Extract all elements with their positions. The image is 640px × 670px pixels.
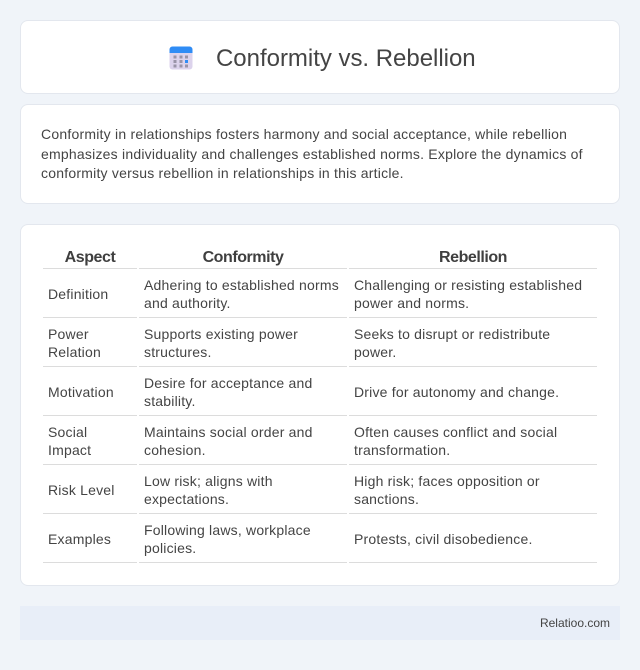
row: power relation: Relation — [48, 344, 101, 360]
row: risk level: Risk Level — [48, 482, 115, 498]
table header: Aspect — [65, 249, 115, 266]
row: examples: Protests, civil disobedience. — [354, 531, 533, 547]
row: risk level: sanctions. — [354, 491, 419, 507]
row: risk level: expectations. — [144, 491, 229, 507]
intro text: Conformity in relationships fosters harmony and social acceptance, while rebellion — [41, 126, 567, 142]
row: power relation — [43, 326, 597, 367]
row: social impact: transformation. — [354, 442, 450, 458]
row: definition: power and norms. — [354, 295, 469, 311]
row: motivation — [43, 375, 597, 416]
intro text: conformity versus rebellion in relationships in this article. — [41, 165, 404, 181]
row: definition: Definition — [48, 286, 108, 302]
row: social impact: Social — [48, 424, 87, 440]
row: examples: Following laws, workplace — [144, 522, 311, 538]
row: social impact: Maintains social order and — [144, 424, 313, 440]
row: definition: Challenging or resisting established — [354, 277, 582, 293]
panel: introduction — [20, 104, 620, 204]
intro text — [41, 126, 583, 181]
row: risk level: Low risk; aligns with — [144, 473, 273, 489]
footer credit: Relatioo.com — [540, 616, 610, 630]
row: examples: policies. — [144, 540, 196, 556]
row: social impact — [43, 424, 597, 465]
row: social impact: Impact — [48, 442, 91, 458]
row: power relation: Seeks to disrupt or redistribute — [354, 326, 550, 342]
intro text: emphasizes individuality and challenges established norms. Explore the dynamics of — [41, 146, 583, 162]
row: motivation: Motivation — [48, 384, 114, 400]
row: risk level: High risk; faces opposition or — [354, 473, 540, 489]
table header: Conformity — [203, 249, 283, 266]
row: social impact: Often causes conflict and social — [354, 424, 557, 440]
row: power relation: Power — [48, 326, 89, 342]
title: Conformity vs. Rebellion — [216, 45, 476, 72]
row: definition: Adhering to established norms — [144, 277, 339, 293]
row: power relation: structures. — [144, 344, 212, 360]
icon: calendar — [170, 46, 192, 70]
row: definition — [43, 277, 597, 318]
row: power relation: Supports existing power — [144, 326, 298, 342]
row: power relation: power. — [354, 344, 396, 360]
row: risk level — [43, 473, 597, 514]
footer — [20, 606, 620, 640]
row: social impact: cohesion. — [144, 442, 206, 458]
table header: Rebellion — [439, 249, 507, 266]
panel: comparison table — [20, 224, 620, 586]
panel: title card — [20, 20, 620, 94]
row: examples: Examples — [48, 531, 111, 547]
row: definition: and authority. — [144, 295, 231, 311]
row: motivation: Drive for autonomy and change. — [354, 384, 559, 400]
row: motivation: Desire for acceptance and — [144, 375, 312, 391]
row: motivation: stability. — [144, 393, 196, 409]
table header — [43, 249, 597, 269]
